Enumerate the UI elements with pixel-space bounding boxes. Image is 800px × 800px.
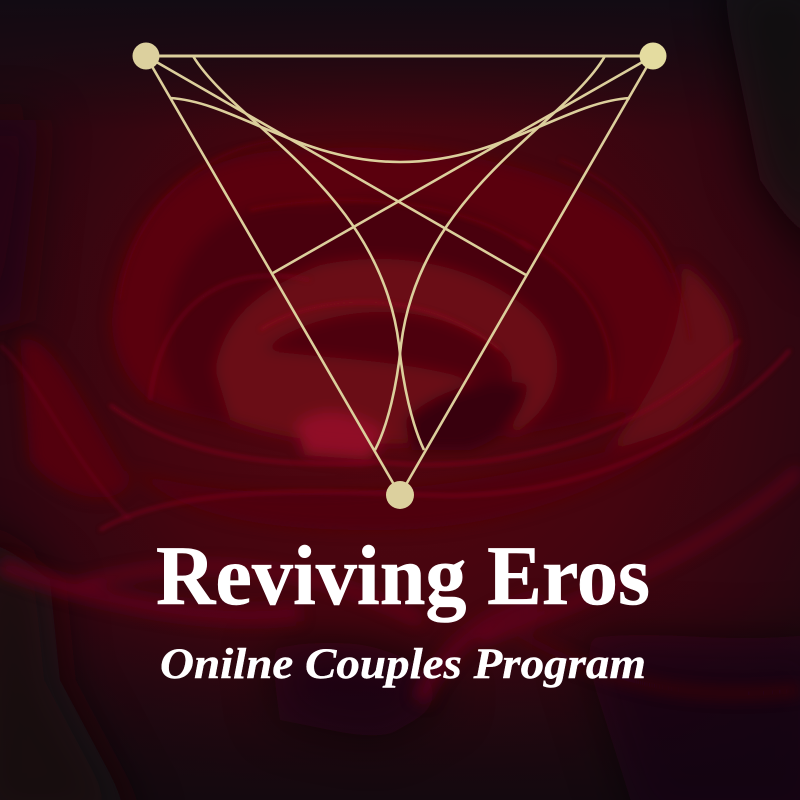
title: Reviving Eros bbox=[156, 529, 650, 623]
bottom-curving arc bbox=[170, 98, 630, 162]
node: top left bbox=[132, 42, 160, 70]
top edge of triangle bbox=[146, 54, 653, 58]
left edge of triangle bbox=[146, 56, 400, 495]
right sweeping arc bbox=[375, 56, 605, 450]
node: bottom bbox=[386, 481, 414, 509]
left sweeping arc bbox=[193, 56, 424, 450]
right edge of triangle bbox=[400, 56, 653, 495]
diagonal line from top right bbox=[273, 56, 653, 273]
diagonal line from top left bbox=[146, 56, 526, 275]
triangle emblem bbox=[132, 42, 666, 509]
subtitle: Onilne Couples Program bbox=[160, 641, 646, 688]
node: top right bbox=[640, 42, 666, 70]
